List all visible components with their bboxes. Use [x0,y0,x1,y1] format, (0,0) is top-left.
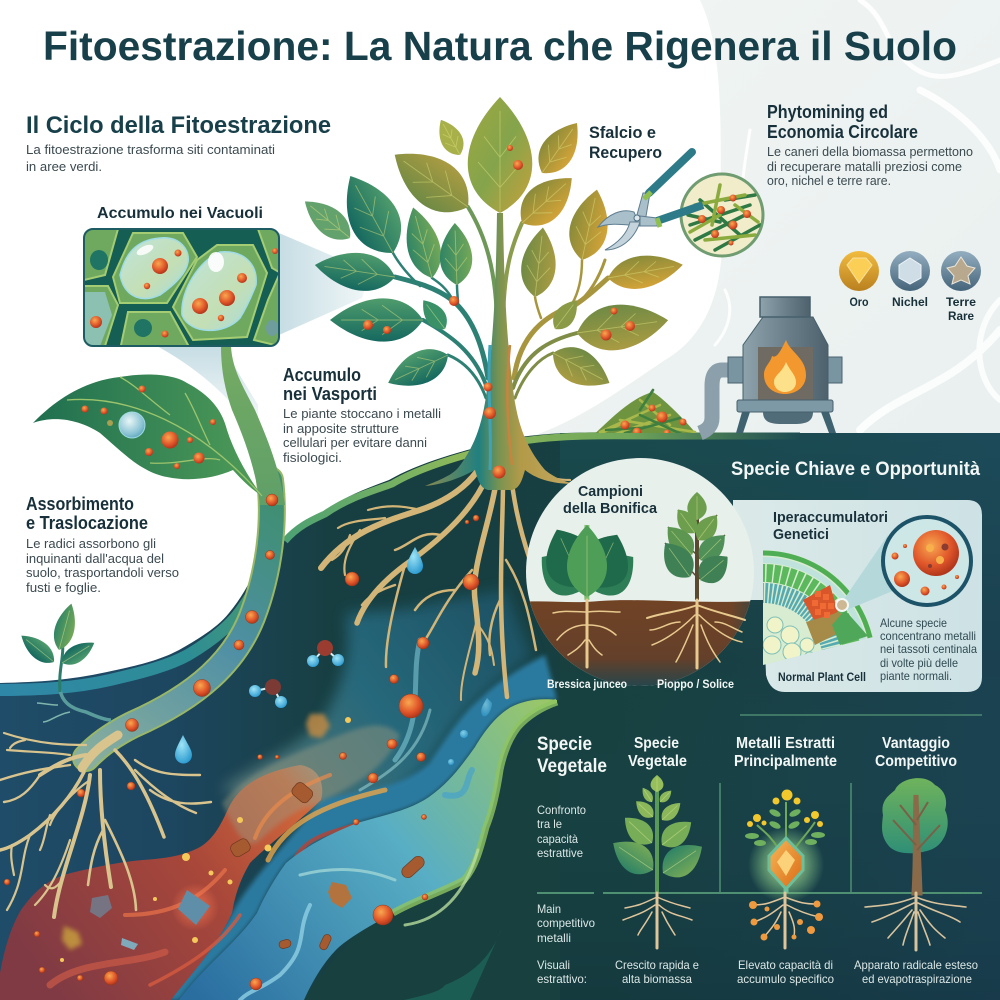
text block: Phytomining: Le caneri della biomassa permettono [767,144,973,159]
text block: Assorbimento e Traslocazione: fusti e foglie. [26,580,101,595]
tree branches [393,207,608,398]
table row labels: competitivo [537,916,595,930]
title: Fitoestrazione: La Natura che Rigenera il Suolo [43,23,957,69]
tree metal dots [363,145,635,478]
card heading: Iperaccumulatori Genetici: Genetici [773,526,829,543]
text block: Assorbimento e Traslocazione: Le radici assorbono gli [26,536,156,551]
heading: Campioni della Bonifica: della Bonifica [563,500,658,517]
text block: Accumulo nei Vasporti: Le piante stoccano i metalli [283,406,441,421]
dividers and table rules [537,715,982,893]
text block: Phytomining: Phytomining ed [767,102,888,122]
ground strip [285,436,800,541]
metal labels: Nichel [892,295,928,309]
text block: Accumulo nei Vasporti: in apposite strutture [283,421,399,436]
table row labels: tra le [537,817,562,831]
plant names: Pioppo / Solice [657,677,734,691]
tan flow over the band [222,726,400,844]
table headings: Vantaggio [882,735,950,752]
heading: Il Ciclo della Fitoestrazione: in aree verdi. [26,159,102,174]
flame [764,340,806,394]
underground particles [0,494,492,990]
water drops [175,547,492,765]
metal labels: Terre [946,295,976,309]
text block: Assorbimento e Traslocazione: Assorbimento [26,494,134,514]
heading: Campioni della Bonifica [563,483,658,517]
soil and underground [0,432,1000,1000]
text block: Accumulo nei Vasporti: Accumulo [283,365,361,385]
text block: Phytomining: di recuperare matalli preziosi come [767,159,962,174]
metal labels: Rare [948,309,974,323]
plant: poplar [647,492,745,668]
text block: Accumulo nei Vasporti [283,365,441,465]
metal dots along vessel [4,494,479,990]
card heading: Iperaccumulatori Genetici [773,509,888,543]
mid water band [221,590,532,813]
clean blue band [179,699,557,1000]
text block: Phytomining: Economia Circolare [767,122,918,142]
table row labels: capacità [537,832,578,846]
leaves [468,97,532,213]
table headings: Specie [537,734,592,755]
biomass pile [596,388,696,433]
table headings: Vegetale [537,756,607,777]
card text: Alcune specie [880,616,947,630]
text block: Accumulo nei Vasporti: nei Vasporti [283,384,377,404]
table captions: Elevato capacità di [738,958,833,972]
text block: Phytomining [767,102,973,188]
text block: Assorbimento e Traslocazione: suolo, trasportandoli verso [26,565,179,580]
shears [598,152,703,250]
label: Accumulo nei Vacuoli: Accumulo nei Vacuoli [97,205,263,222]
table headings: Principalmente [734,753,837,770]
table captions: Apparato radicale esteso [854,958,978,972]
text block: Accumulo nei Vasporti: cellulari per evitare danni [283,435,427,450]
contaminated red band [0,765,322,1000]
champion circle [526,458,754,686]
furnace [700,297,842,433]
shears and biomass closeup [598,152,763,256]
panel: species card and champion circle [526,458,982,692]
zoom cones to vacuole panel [157,233,370,440]
card heading: Iperaccumulatori Genetici: Iperaccumulatori [773,509,888,526]
big left leaf [33,375,263,497]
stem to vacuole panel [221,346,285,505]
heading: Specie Chiave: Specie Chiave e Opportunità [731,459,980,480]
heading: Il Ciclo della Fitoestrazione: La fitoestrazione trasforma siti contaminati [26,142,275,157]
metal labels [850,295,976,323]
table headings [537,734,957,777]
stem and vessel [86,480,272,758]
card text [880,616,977,683]
table headings: Competitivo [875,753,957,770]
table row labels: estrattivo: [537,972,587,986]
text block: Assorbimento e Traslocazione: inquinanti dall'acqua del [26,551,164,566]
plant 1: species [605,775,710,948]
label: Sfalcio e Recupero: Recupero [589,143,662,162]
table captions: alta biomassa [622,972,692,986]
label: Sfalcio e Recupero [589,123,662,162]
heading: Campioni della Bonifica: Campioni [578,483,643,500]
plant: brassica [529,519,646,667]
label: Normal Plant Cell: Normal Plant Cell [778,670,866,684]
card text: concentrano metalli [880,629,976,643]
table headings: Metalli Estratti [736,735,835,752]
vacuole panel [84,225,279,350]
metal labels: Oro [850,295,868,309]
water molecules [249,640,344,708]
table row labels: metalli [537,931,571,945]
heading: Il Ciclo della Fitoestrazione: Il Ciclo della Fitoestrazione [26,112,331,139]
magnifier cone [842,535,895,612]
underground band: edge of white lobe [0,560,266,690]
tree roots [321,445,570,700]
stream highlights [240,640,478,1000]
plant 2: metal gem [745,790,825,948]
table captions: ed evapotraspirazione [862,972,972,986]
table captions: Crescito rapida e [615,958,699,972]
vacuole panel border [84,229,279,346]
left root system [0,733,211,917]
table row labels [537,803,595,986]
tree [296,97,686,700]
pebbles and crystals [229,780,427,951]
plant 3: tree [865,778,966,950]
text block: Assorbimento e Traslocazione: e Traslocazione [26,513,148,533]
trunk [425,213,575,490]
card text: di volte più delle [880,656,958,670]
table row labels: Visuali [537,958,570,972]
table row labels: estrattive [537,846,583,860]
heading: Il Ciclo della Fitoestrazione [26,112,331,174]
orange streaks [50,775,385,985]
metal icons [839,251,981,291]
label: Sfalcio e Recupero: Sfalcio e [589,123,656,142]
text block: Phytomining: oro, nichel e terre rare. [767,173,891,188]
plant names [547,677,734,691]
plant names: Bressica junceo [547,677,627,691]
table headings: Vegetale [628,753,687,770]
green edge of clean band [393,702,557,913]
text block: Accumulo nei Vasporti: fisiologici. [283,450,342,465]
table captions: accumulo specifico [737,972,834,986]
table headings: Specie [634,735,679,752]
table row labels: Main [537,902,561,916]
dark green wisp [404,926,503,1000]
text block: Assorbimento e Traslocazione [26,494,179,595]
blue water body [165,655,557,1000]
card text: piante normali. [880,669,952,683]
card text: nei tassoti centinala [880,642,977,656]
table row labels: Confronto [537,803,586,817]
small plant [16,601,111,722]
magnifier [883,517,971,605]
table captions [615,958,978,986]
tissue cross section [763,550,873,665]
